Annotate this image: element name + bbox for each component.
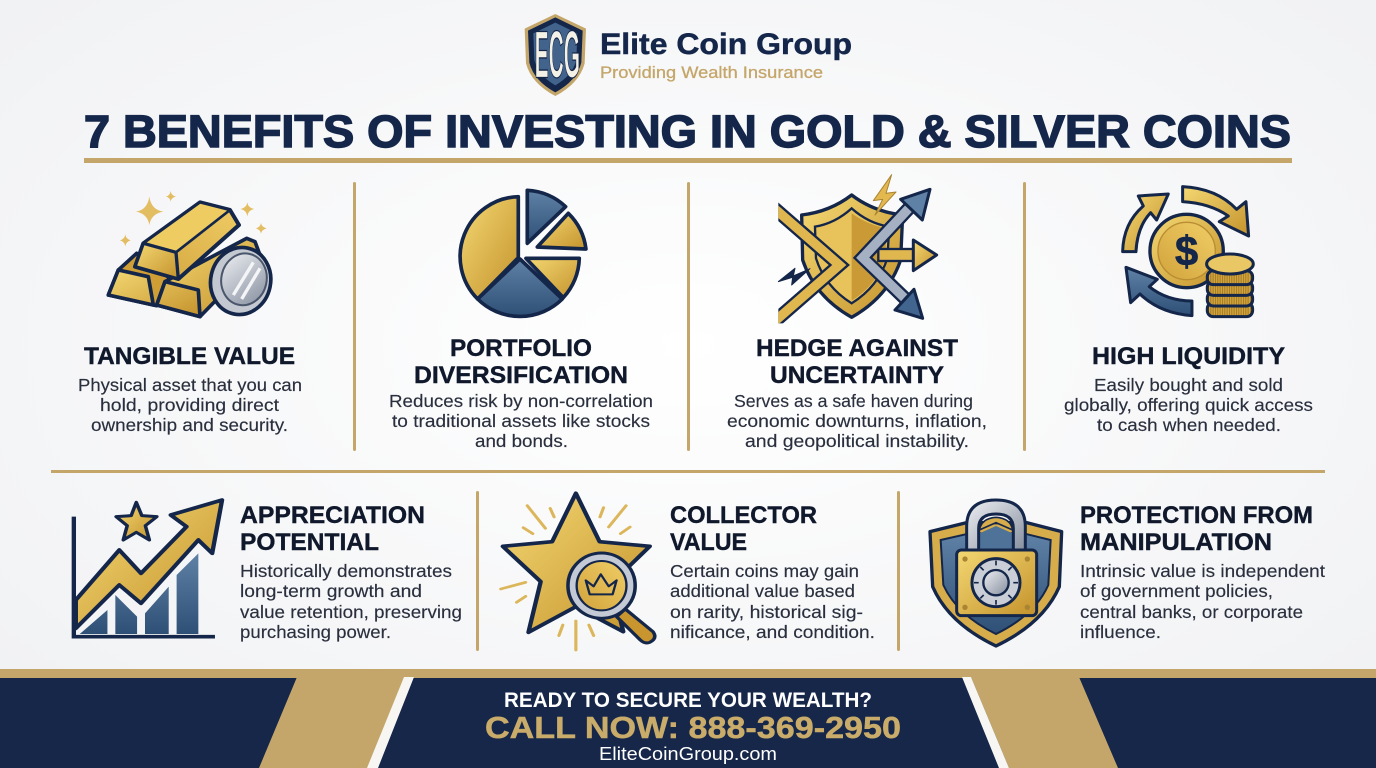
panel: appreciation potential: long-term growth and — [240, 581, 422, 601]
phone number: CALL NOW: 888-369-2950 — [485, 710, 901, 745]
heading: HEDGE AGAINST — [756, 335, 958, 362]
panel: appreciation potential — [74, 500, 462, 642]
panel: protection from manipulation — [930, 500, 1325, 646]
heading: TANGIBLE VALUE — [84, 343, 295, 370]
footer banner — [0, 669, 1376, 768]
icon: padlock on shield — [930, 500, 1062, 646]
panel: hedge against uncertainty: economic downturns, inflation, — [727, 411, 987, 431]
panel: high liquidity — [1064, 187, 1313, 435]
panel: portfolio diversification: to traditional assets like stocks — [392, 411, 650, 431]
description: Reduces risk by non-correlation — [389, 391, 653, 411]
panel: hedge against uncertainty — [727, 175, 987, 451]
heading: PROTECTION FROM — [1080, 502, 1313, 529]
text: ECG — [535, 18, 580, 92]
panel: tangible value — [78, 191, 302, 435]
panel: protection from manipulation: MANIPULATION — [1080, 529, 1272, 556]
panel: portfolio diversification: DIVERSIFICATION — [414, 362, 628, 389]
description: Certain coins may gain — [670, 561, 859, 581]
heading: APPRECIATION — [240, 502, 425, 529]
icon: pie chart — [460, 190, 586, 316]
icon: coin with circular arrows — [1123, 187, 1253, 317]
brand name: Elite Coin Group — [600, 28, 852, 61]
panel: high liquidity: globally, offering quick access — [1064, 395, 1313, 415]
panel: high liquidity: to cash when needed. — [1097, 415, 1281, 435]
heading: PORTFOLIO — [450, 335, 592, 362]
tagline: Providing Wealth Insurance — [600, 63, 823, 82]
panel: collector value: on rarity, historical sig- — [670, 602, 863, 622]
icon: shield with arrows — [767, 175, 937, 328]
icon: coin with circular arrows: $ — [1175, 228, 1198, 275]
description: Historically demonstrates — [240, 561, 452, 581]
panel: appreciation potential: value retention, preserving — [240, 602, 462, 622]
heading: HIGH LIQUIDITY — [1092, 343, 1285, 370]
description: Intrinsic value is independent — [1080, 561, 1325, 581]
panel: portfolio diversification: and bonds. — [475, 431, 568, 451]
icon: gold bars and silver coin — [108, 191, 277, 320]
panel: collector value: VALUE — [670, 529, 747, 556]
description: Easily bought and sold — [1094, 375, 1283, 395]
panel: portfolio diversification — [389, 190, 653, 451]
icon: rising chart with star — [74, 500, 222, 637]
icon: star and magnifier — [501, 493, 655, 650]
title: 7 BENEFITS OF INVESTING IN GOLD & SILVER COINS — [84, 106, 1291, 157]
panel: tangible value: hold, providing direct — [100, 395, 279, 415]
panel: protection from manipulation: of government policies, — [1080, 581, 1273, 601]
heading: COLLECTOR — [670, 502, 817, 529]
website: EliteCoinGroup.com — [599, 744, 777, 764]
panel: appreciation potential: POTENTIAL — [240, 529, 379, 556]
panel: protection from manipulation: influence. — [1080, 622, 1161, 642]
panel: appreciation potential: purchasing power. — [240, 622, 391, 642]
panel: collector value: additional value based — [670, 581, 855, 601]
panel: tangible value: ownership and security. — [91, 415, 288, 435]
panel: hedge against uncertainty: and geopolitical instability. — [745, 431, 969, 451]
call to action line: READY TO SECURE YOUR WEALTH? — [504, 689, 872, 712]
panel: hedge against uncertainty: UNCERTAINTY — [770, 362, 944, 389]
description: Serves as a safe haven during — [734, 391, 973, 411]
panel: collector value — [501, 493, 875, 650]
logo: ECG shield — [525, 14, 586, 96]
description: Physical asset that you can — [78, 375, 302, 395]
panel: collector value: nificance, and condition. — [670, 622, 875, 642]
panel: protection from manipulation: central banks, or corporate — [1080, 602, 1303, 622]
